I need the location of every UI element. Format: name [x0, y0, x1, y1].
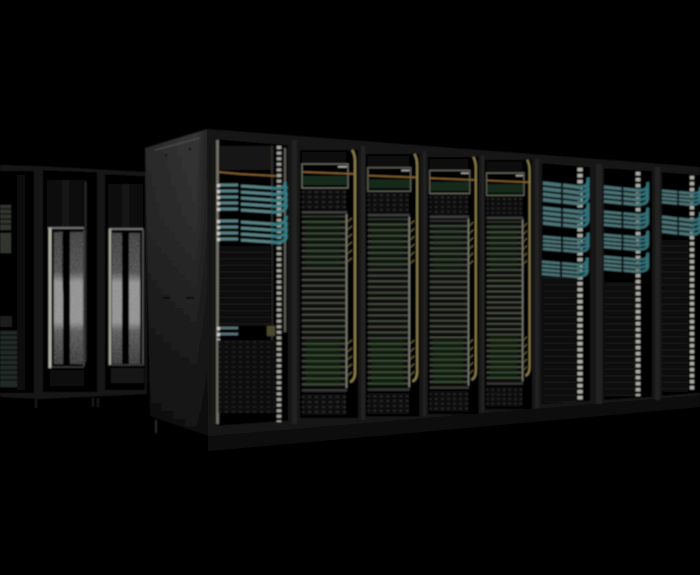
bay 8: network rack — [662, 172, 700, 396]
bay 3: cabling — [366, 154, 420, 417]
rear rack feet — [36, 398, 98, 408]
main rack side panel — [145, 129, 209, 436]
rear rack group at left — [0, 165, 147, 408]
rear rack frame — [0, 165, 147, 399]
frame posts — [292, 140, 660, 424]
bay 4: cabling — [428, 157, 478, 414]
bay 5: cabling — [485, 160, 532, 409]
bay 1 left rail — [216, 140, 219, 424]
main rack row — [145, 129, 700, 451]
bay 7: network rack — [604, 168, 652, 400]
rear rack bay A — [0, 171, 34, 393]
bay 6: network rack — [542, 163, 590, 404]
rear rack bay B with filter panel — [43, 170, 97, 392]
teal cable group upper — [220, 182, 286, 212]
bay 1 right rail — [277, 146, 281, 422]
white port markers — [217, 184, 220, 340]
orange cable — [218, 172, 276, 176]
bay 2: cabling — [300, 150, 358, 418]
main rack front frame — [207, 129, 700, 451]
small cable rows — [220, 328, 238, 334]
teal cable group lower — [220, 216, 286, 242]
illustration: row of data-centre server racks on black — [0, 128, 700, 451]
lower dark block — [218, 340, 275, 413]
plinth — [208, 395, 700, 451]
brass fitting — [267, 326, 275, 336]
upper dark panel — [220, 146, 274, 170]
bay 1: switch rack with teal cables — [216, 139, 288, 426]
louvred middle panel — [220, 246, 272, 326]
rear rack bay C with filter panel — [105, 174, 145, 390]
